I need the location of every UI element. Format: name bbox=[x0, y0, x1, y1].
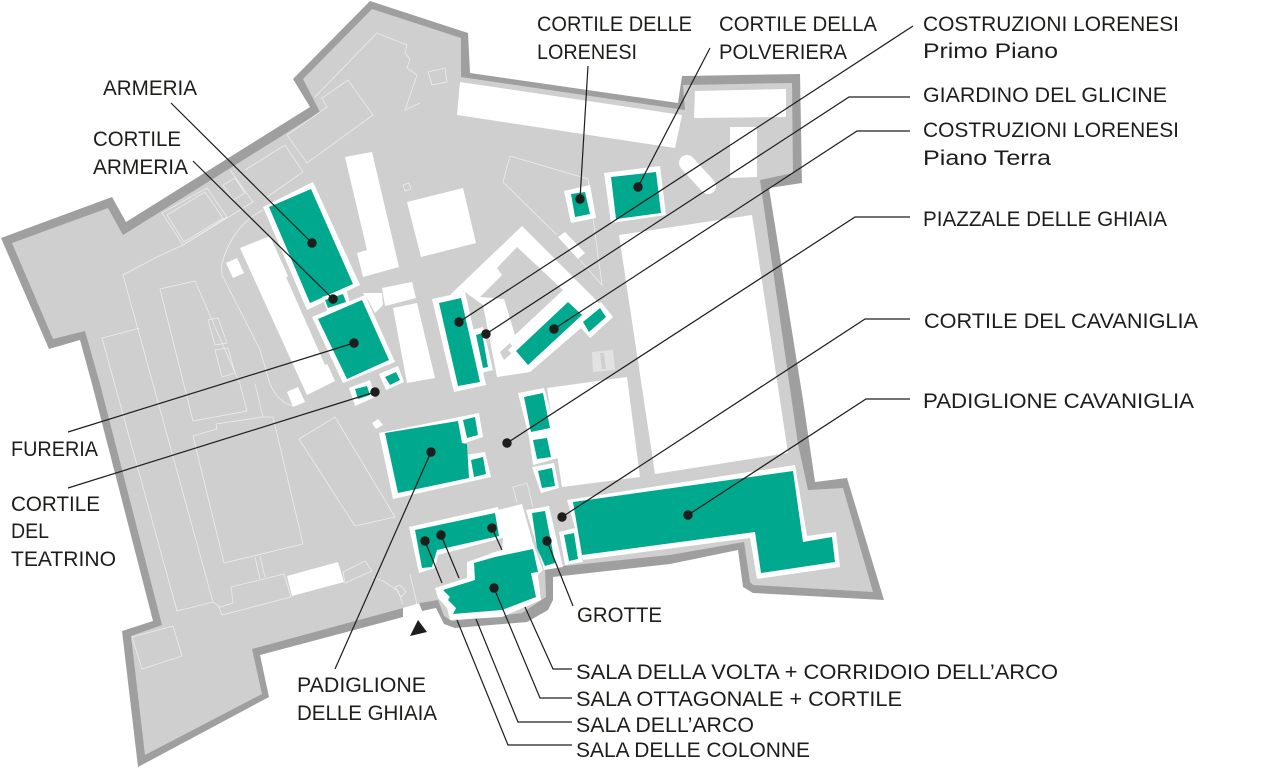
callout: padiglione cavaniglia: PADIGLIONE CAVANIGLIA bbox=[923, 390, 1194, 413]
callout: cortile del cavaniglia: CORTILE DEL CAVANIGLIA bbox=[924, 310, 1198, 333]
zone: grotte bbox=[526, 506, 563, 570]
callout: costruzioni lorenesi primo piano: Primo Piano bbox=[923, 40, 1058, 63]
fortress ground bbox=[12, 9, 873, 755]
callout: cortile delle lorenesi: LORENESI bbox=[537, 41, 637, 64]
zone: sala ottagonale bbox=[435, 543, 543, 620]
callout: costruzioni lorenesi piano terra: Piano Terra bbox=[923, 147, 1051, 170]
callout: padiglione delle ghiaia: PADIGLIONE bbox=[297, 674, 426, 697]
zone: giardino del glicine bbox=[472, 327, 493, 373]
callout: sala dell'arco bbox=[436, 530, 754, 737]
callout: giardino del glicine: GIARDINO DEL GLICINE bbox=[923, 84, 1167, 107]
callout: cortile del teatrino: CORTILE bbox=[11, 493, 100, 516]
zone: cortile del cavaniglia bbox=[559, 528, 583, 565]
callout: cortile delle lorenesi bbox=[537, 13, 692, 204]
callout: grotte: GROTTE bbox=[577, 604, 662, 627]
callout: sala delle colonne bbox=[420, 536, 810, 762]
icon: entrance arrow bbox=[410, 620, 427, 636]
callout: sala ottagonale bbox=[489, 583, 902, 711]
callout: costruzioni lorenesi piano terra: COSTRUZIONI LORENESI bbox=[923, 119, 1179, 142]
callout: giardino del glicine bbox=[481, 84, 1167, 339]
zone: cortile armeria bbox=[322, 289, 350, 313]
callout: cortile armeria: CORTILE bbox=[93, 128, 181, 151]
zone: piazzale buildings bbox=[518, 388, 559, 493]
callout: costruzioni lorenesi primo piano bbox=[454, 13, 1179, 327]
zone: costruzioni lorenesi primo piano bbox=[432, 292, 486, 392]
callout: costruzioni lorenesi primo piano: COSTRUZIONI LORENESI bbox=[923, 13, 1179, 36]
callout: cortile armeria bbox=[93, 128, 338, 304]
callout: cortile delle lorenesi: CORTILE DELLE bbox=[537, 13, 692, 36]
zone: cortile della polveriera bbox=[604, 166, 666, 223]
callout: cortile del teatrino: TEATRINO bbox=[11, 548, 116, 571]
zone: small court bbox=[379, 366, 404, 390]
entrance gap bbox=[403, 604, 423, 619]
callout: fureria: FURERIA bbox=[11, 438, 98, 461]
callout: padiglione cavaniglia bbox=[683, 390, 1194, 520]
zone: cortile delle lorenesi bbox=[564, 185, 596, 223]
callout: fureria bbox=[11, 338, 359, 461]
callout: cortile del teatrino bbox=[11, 387, 380, 571]
callout: costruzioni lorenesi piano terra bbox=[549, 119, 1179, 334]
zone: costruzioni lorenesi piano terra bbox=[508, 296, 613, 372]
callout: cortile della polveriera bbox=[633, 13, 877, 192]
callout: cortile della polveriera: CORTILE DELLA bbox=[719, 13, 877, 36]
callout: sala ottagonale: SALA OTTAGONALE + CORTILE bbox=[576, 688, 902, 711]
callout: cortile armeria: ARMERIA bbox=[93, 156, 188, 179]
zone: armeria bbox=[263, 182, 360, 310]
callout: piazzale delle ghiaia: PIAZZALE DELLE GHIAIA bbox=[923, 208, 1167, 231]
callout: cortile del teatrino: DEL bbox=[11, 520, 49, 543]
thin outlines of minor buildings bbox=[102, 33, 602, 669]
zone: sala delle colonne, arco, volta bbox=[409, 507, 503, 573]
zone: padiglione cavaniglia bbox=[567, 465, 840, 579]
callout: sala delle colonne: SALA DELLE COLONNE bbox=[576, 739, 810, 762]
callout: grotte bbox=[542, 536, 662, 627]
callout: sala della volta: SALA DELLA VOLTA + CORRIDOIO DELL’ARCO bbox=[576, 661, 1058, 684]
white buildings bbox=[226, 82, 788, 596]
zone: padiglione delle ghiaia bbox=[379, 413, 491, 499]
callout: padiglione delle ghiaia: DELLE GHIAIA bbox=[297, 702, 437, 725]
callout: sala della volta bbox=[487, 523, 1058, 684]
callout: padiglione delle ghiaia bbox=[297, 447, 437, 725]
callout: armeria bbox=[103, 77, 317, 248]
outer fortress wall bbox=[1, 1, 884, 767]
callout: sala dell'arco: SALA DELL’ARCO bbox=[576, 714, 754, 737]
zone: cortile del teatrino bbox=[349, 380, 375, 406]
callout: piazzale delle ghiaia bbox=[502, 208, 1167, 448]
callout: armeria: ARMERIA bbox=[103, 77, 197, 100]
callout: cortile della polveriera: POLVERIERA bbox=[719, 41, 847, 64]
zone: fureria bbox=[312, 295, 395, 383]
callout: cortile del cavaniglia bbox=[557, 310, 1198, 522]
